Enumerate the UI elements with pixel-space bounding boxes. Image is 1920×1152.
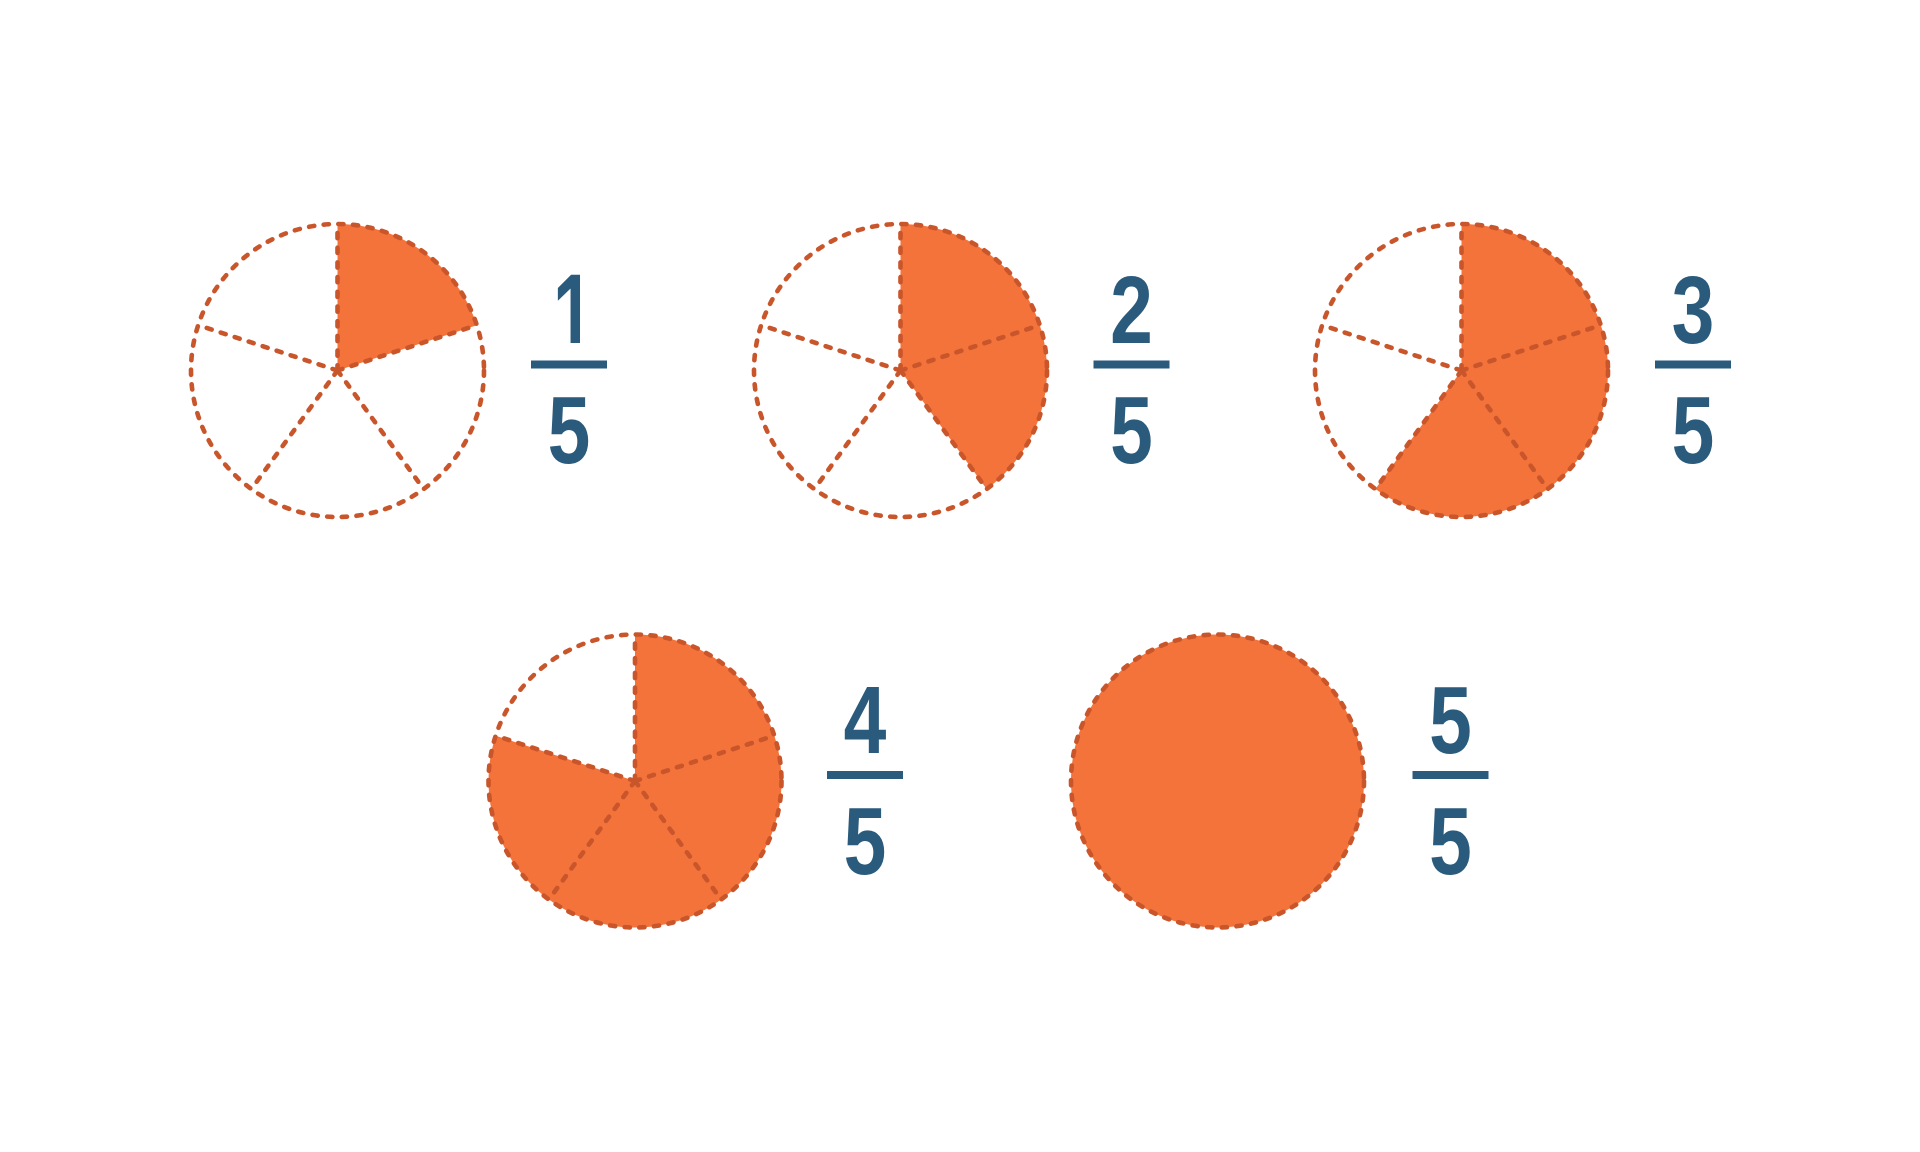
fraction: 2/5: 5	[1110, 377, 1153, 484]
fraction: 3/5: 5	[1672, 377, 1714, 484]
fraction: 2/5	[1094, 257, 1170, 484]
pie chart: two fifths shaded	[754, 224, 1047, 517]
fraction: 2/5: 2	[1110, 257, 1153, 364]
pie chart: fully shaded	[1071, 634, 1364, 928]
pie chart: three fifths shaded	[1315, 224, 1608, 517]
fraction: 1/5	[531, 274, 607, 464]
fraction: 5/5: 5	[1429, 788, 1472, 895]
fraction: 4/5: 4	[844, 667, 886, 774]
fraction: 5/5: 5	[1429, 667, 1472, 774]
pie chart: four fifths shaded	[488, 634, 782, 928]
pie chart: one fifth shaded	[191, 224, 484, 517]
fraction: 1/5: 1	[553, 250, 595, 382]
fraction: 3/5: 3	[1672, 257, 1714, 364]
fraction: 1/5: 5	[548, 377, 590, 484]
fraction: 3/5	[1655, 257, 1731, 484]
fraction: 4/5	[827, 667, 903, 895]
fraction: 4/5: 5	[844, 788, 886, 895]
fraction: 5/5	[1412, 667, 1488, 895]
